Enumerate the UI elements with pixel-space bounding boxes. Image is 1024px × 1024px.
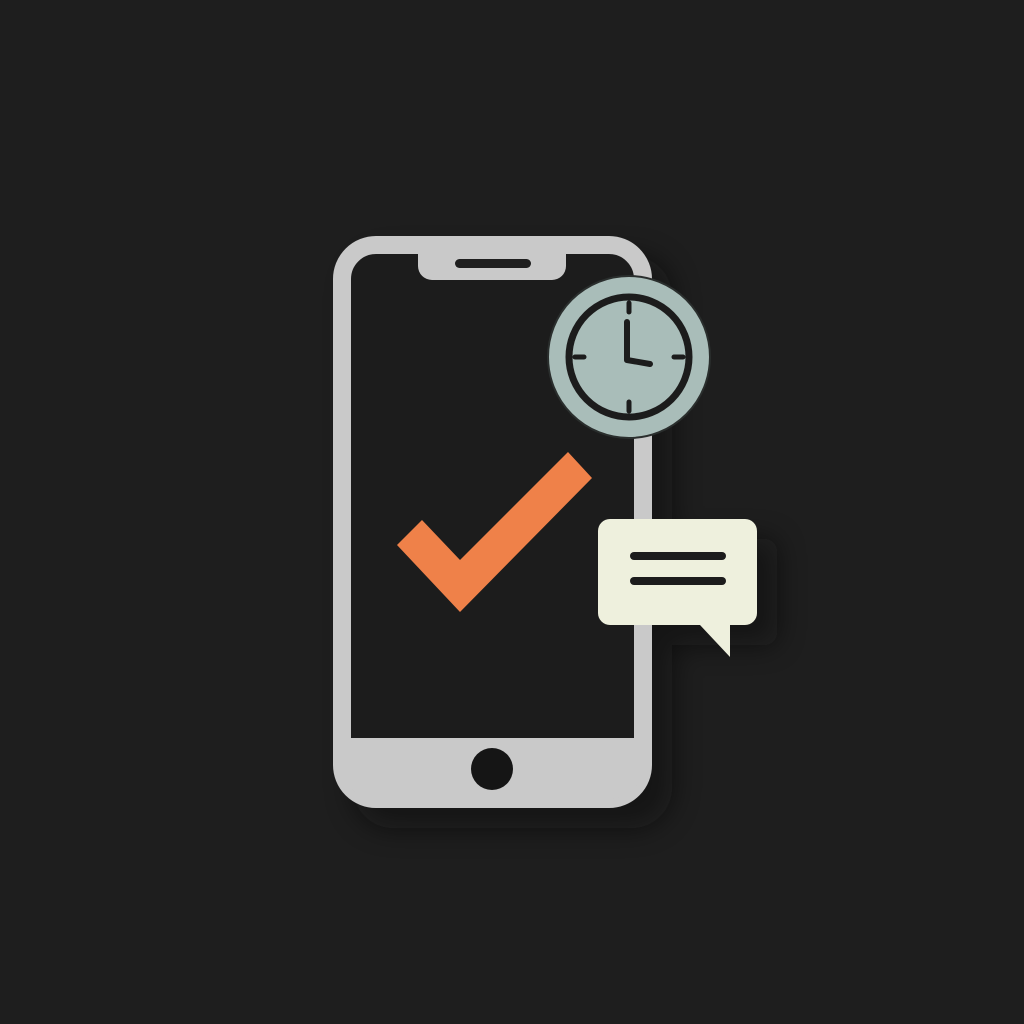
notch xyxy=(418,250,566,280)
icon: chat bubble xyxy=(598,519,757,657)
check mark xyxy=(397,452,592,612)
phone bottom bezel xyxy=(342,738,643,799)
phone xyxy=(342,245,643,799)
shadows xyxy=(353,256,777,828)
icon: clock xyxy=(548,276,710,438)
home button xyxy=(471,748,513,790)
